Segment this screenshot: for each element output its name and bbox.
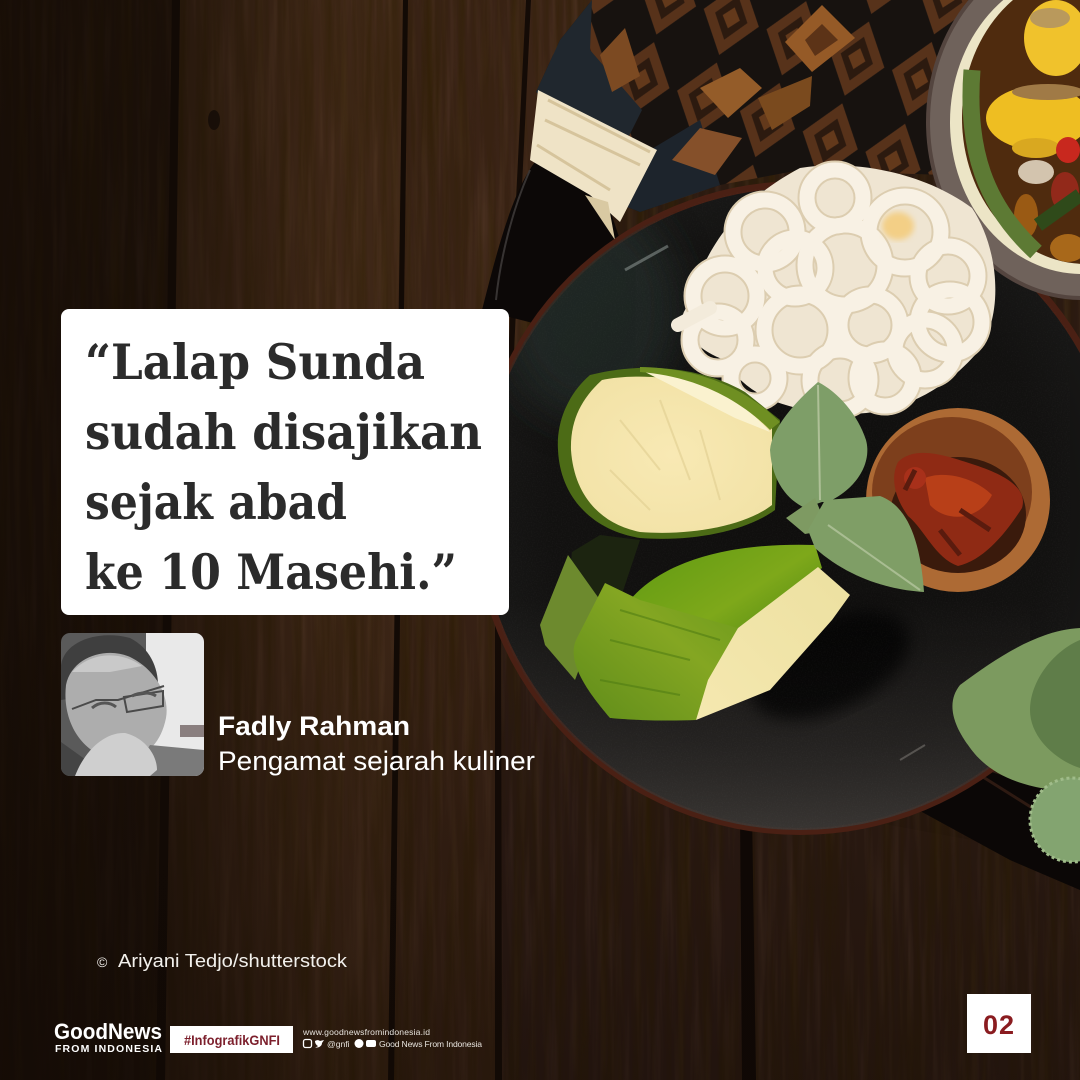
- photo: wooden sambal bowl: [866, 408, 1050, 592]
- page number badge: 02: [983, 1010, 1015, 1040]
- social links: www.goodnewsfromindonesia.id: [302, 1027, 430, 1037]
- author name and role: [218, 711, 535, 776]
- quote text: “Lalap Sunda: [85, 333, 425, 391]
- hashtag badge: [170, 1026, 293, 1053]
- photo: tray under the plate: [482, 150, 1080, 890]
- photo: soup bowl with corn: [928, 0, 1080, 298]
- social links: [302, 1027, 482, 1049]
- logo: GoodNews from Indonesia: FROM INDONESIA: [55, 1043, 162, 1055]
- panel: quote card: [61, 309, 509, 615]
- photo: mint leaves on the plate: [770, 382, 924, 592]
- icon: instagram: [304, 1040, 312, 1048]
- logo: GoodNews from Indonesia: [54, 1019, 162, 1055]
- logo: GoodNews from Indonesia: GoodNews: [54, 1019, 162, 1044]
- portrait: Fadly Rahman: [61, 633, 204, 776]
- quote text: sudah disajikan: [85, 403, 482, 461]
- social links: Good News From Indonesia: [379, 1039, 482, 1049]
- social links: @gnfi: [327, 1039, 350, 1049]
- quote text: sejak abad: [85, 473, 347, 531]
- photo: sticky rice in banana leaf, bottom: [540, 535, 850, 721]
- photo: corn husk knot: [530, 90, 657, 240]
- page number badge: [967, 994, 1031, 1053]
- photo: mint leaves bottom right: [952, 628, 1080, 862]
- photo credit: ©: [97, 954, 108, 970]
- hashtag badge: #InfografikGNFI: [184, 1033, 280, 1048]
- photo: krupuk ring crackers: [678, 165, 995, 414]
- author name and role: Pengamat sejarah kuliner: [218, 746, 535, 776]
- author name and role: Fadly Rahman: [218, 711, 410, 741]
- photo credit: Ariyani Tedjo/shutterstock: [118, 950, 348, 971]
- photo: dark ceramic plate: [470, 180, 1080, 840]
- quote text: [85, 333, 482, 601]
- quote text: ke 10 Masehi.”: [85, 543, 457, 601]
- icon: facebook: [354, 1039, 364, 1048]
- photo: sticky rice in leaf, top: [558, 367, 780, 539]
- icon: youtube: [366, 1040, 376, 1047]
- icon: twitter: [315, 1040, 324, 1048]
- photo: batik cloth: [536, 0, 968, 212]
